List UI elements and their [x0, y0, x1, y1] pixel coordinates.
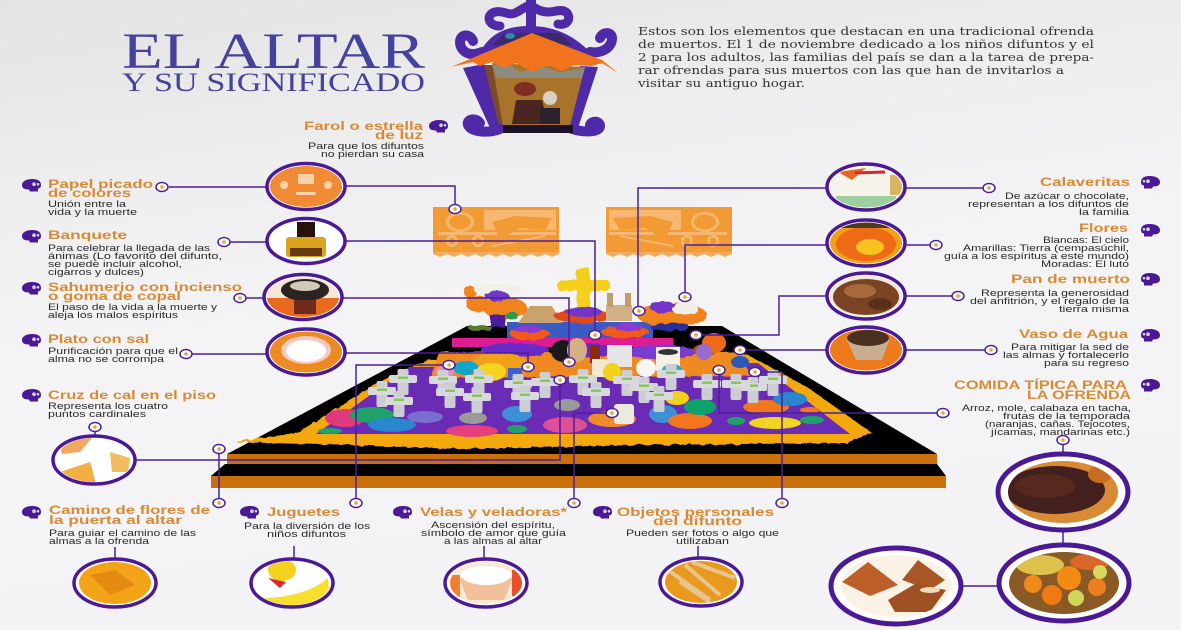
- lower step: [211, 464, 946, 488]
- item: sahumerio: [22, 274, 344, 320]
- item: flores: Amarillas: Tierra (cempasúchil,: [963, 243, 1129, 253]
- item: plato con sal: alma no se corrompa: [48, 354, 165, 364]
- item: objetos personales: [593, 505, 779, 606]
- item: objetos personales: Pueden ser fotos o algo que: [626, 528, 779, 538]
- item: banquete: [22, 218, 346, 277]
- flower mat: [232, 352, 872, 449]
- item: velas: Ascensión del espíritu,: [431, 520, 555, 530]
- altar: [211, 267, 946, 488]
- item: juguetes: Para la diversión de los: [244, 521, 371, 531]
- item: pan de muerto: tierra misma: [1059, 304, 1130, 314]
- item: comida tipica: Arroz, mole, calabaza en tacha,: [962, 403, 1131, 413]
- item: cruz de cal: Cruz de cal en el piso: [48, 388, 216, 402]
- item: vaso de agua: [826, 327, 1160, 373]
- item: vaso de agua: Para mitigar la sed de: [1011, 342, 1129, 352]
- item: pan de muerto: Representa la generosidad: [981, 288, 1129, 298]
- item: camino de flores: almas a la ofrenda: [49, 536, 150, 546]
- offerings row: [436, 333, 749, 381]
- item: banquete: se puede incluir alcohol,: [48, 259, 182, 269]
- intro text: rar ofrendas para sus muertos con las que han de invitarlos a: [638, 63, 1064, 77]
- item: camino de flores: Camino de flores de: [49, 503, 210, 517]
- item: vaso de agua: para su regreso: [1044, 358, 1129, 368]
- photo: calabaza: [831, 548, 961, 624]
- item: comida tipica: jícamas, mandarinas etc.): [990, 427, 1130, 437]
- item: farol: Para que los difuntos: [308, 141, 425, 151]
- right flowers: [637, 301, 707, 331]
- item: flores: guía a los espíritus a este mundo): [944, 251, 1129, 261]
- item: velas: [393, 505, 567, 607]
- item: vaso de agua: Vaso de Agua: [1019, 327, 1128, 341]
- item: plato con sal: Purificación para que el: [48, 346, 178, 356]
- item: comida tipica: (naranjas, cañas. Tejocotes,: [985, 419, 1130, 429]
- item: papel picado: Unión entre la: [48, 199, 127, 209]
- altar tiers: [452, 322, 696, 371]
- item: farol: de luz: [375, 128, 423, 142]
- item: calaveritas: la familia: [1079, 207, 1130, 217]
- item: papel picado: Papel picado: [48, 177, 153, 191]
- item: flores: [826, 220, 1160, 269]
- item: sahumerio: o goma de copal: [48, 289, 181, 303]
- item: farol: Farol o estrella: [304, 119, 423, 133]
- item: pan de muerto: Pan de muerto: [1011, 272, 1130, 286]
- item: papel picado: vida y la muerte: [48, 207, 137, 217]
- item: cruz de cal: [22, 388, 216, 484]
- item: banquete: Banquete: [48, 228, 127, 242]
- item: plato con sal: Plato con sal: [48, 332, 149, 346]
- photo: mole: [998, 454, 1128, 530]
- candle on the mat: [614, 404, 634, 424]
- central flowers: [554, 307, 610, 323]
- title: Y SU SIGNIFICADO: [122, 68, 425, 97]
- item: camino de flores: [22, 503, 210, 607]
- pyramid: [518, 306, 562, 323]
- item: velas: símbolo de amor que guía: [421, 528, 567, 538]
- intro text: de muertos. El 1 de noviembre dedicado a los niños difuntos y el: [638, 37, 1094, 51]
- item: calaveritas: [826, 164, 1160, 217]
- item: velas: Velas y veladoras*: [420, 505, 567, 519]
- connector lines: [95, 186, 1063, 586]
- item: banquete: ánimas (Lo favorito del difunto,: [48, 251, 222, 261]
- item: objetos personales: Objetos personales: [617, 505, 774, 519]
- item: farol: no pierdan su casa: [321, 149, 425, 159]
- item: flores: Flores: [1079, 221, 1128, 235]
- item: pan de muerto: [826, 272, 1160, 319]
- item: comida tipica: frutas de la temporada: [1003, 411, 1131, 421]
- icon: paper lantern: [451, 0, 618, 133]
- left flowers: [464, 284, 527, 327]
- item: cruz de cal: puntos cardinales: [48, 409, 147, 419]
- item: vaso de agua: las almas y fortalecerlo: [1003, 350, 1129, 360]
- title: EL ALTAR: [122, 24, 425, 80]
- banner: papel picado left: [433, 207, 559, 257]
- item: banquete: Para celebrar la llegada de las: [48, 243, 211, 253]
- intro text: visitar su antiguo hogar.: [637, 76, 805, 90]
- item: calaveritas: Calaveritas: [1040, 175, 1130, 189]
- title: [122, 24, 425, 97]
- item: velas: a las almas al altar: [444, 536, 542, 546]
- connector dots: [89, 182, 1069, 508]
- upper step: [227, 326, 937, 464]
- item: comida tipica: COMIDA TÍPICA PARA: [954, 377, 1127, 392]
- item: camino de flores: Para guiar el camino de las: [49, 528, 197, 538]
- item: sahumerio: aleja los malos espíritus: [48, 310, 179, 320]
- item: papel picado: de colores: [48, 186, 131, 200]
- item: flores: Blancas: El cielo: [1043, 235, 1129, 245]
- item: farol: [304, 119, 448, 159]
- item: calaveritas: De azúcar o chocolate,: [1005, 191, 1129, 201]
- intro text: [637, 24, 1094, 90]
- item: juguetes: [240, 505, 371, 610]
- photo: fruit: [999, 545, 1129, 621]
- item: sahumerio: Sahumerio con incienso: [48, 280, 242, 294]
- intro text: 2 para los adultos, las familias del país se dan a la tarea de prepa-: [638, 50, 1094, 64]
- item: sahumerio: El paso de la vida a la muerte y: [48, 302, 218, 312]
- item: papel picado: [22, 163, 346, 217]
- yellow cross: [557, 267, 610, 312]
- item: pan de muerto: del anfitrión, y el regalo de la: [970, 296, 1130, 306]
- cathedral: [606, 293, 632, 321]
- item: flores: Moradas: El luto: [1041, 259, 1129, 269]
- item: camino de flores: la puerta al altar: [49, 513, 182, 527]
- item: calaveritas: representan a los difuntos de: [968, 199, 1129, 209]
- item: objetos personales: utilizaban: [676, 536, 729, 546]
- intro text: Estos son los elementos que destacan en una tradicional ofrenda: [638, 24, 1094, 38]
- item: comida tipica: [831, 377, 1160, 624]
- item: juguetes: niños difuntos: [267, 529, 347, 539]
- banner: papel picado right: [606, 207, 732, 257]
- item: objetos personales: del difunto: [653, 514, 742, 528]
- item: cruz de cal: Representa los cuatro: [48, 401, 168, 411]
- item: juguetes: Juguetes: [267, 505, 340, 519]
- crosses: [368, 364, 787, 417]
- item: banquete: cigarros y dulces): [48, 267, 144, 277]
- item: comida tipica: LA OFRENDA: [1027, 388, 1131, 402]
- item: plato con sal: [22, 329, 346, 375]
